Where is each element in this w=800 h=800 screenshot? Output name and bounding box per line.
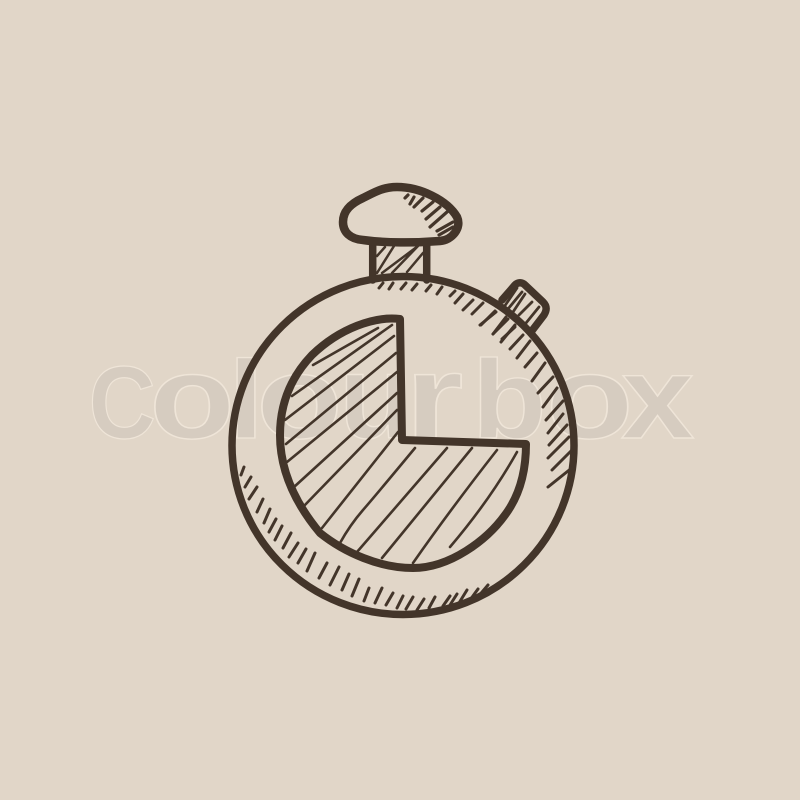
stopwatch stem	[373, 242, 427, 280]
dial diagonal hatching	[285, 325, 517, 563]
icon: stopwatch	[232, 187, 574, 614]
case shading ticks: bottom	[241, 467, 488, 610]
dial pie sector	[280, 319, 526, 568]
watermark: Colourbox: o	[256, 331, 343, 463]
watermark: Colourbox	[89, 329, 694, 464]
watermark: Colourbox: l	[228, 338, 264, 462]
watermark: Colourbox: C	[89, 345, 156, 460]
watermark: Colourbox: o	[546, 331, 633, 463]
watermark: Colourbox: x	[621, 331, 694, 463]
watermark: Colourbox: r	[405, 329, 463, 464]
case shading ticks: right	[480, 312, 573, 487]
watermark: Colourbox: b	[472, 337, 547, 462]
outer case ring	[232, 276, 574, 614]
watermark: Colourbox: o	[149, 332, 235, 464]
top crown button	[343, 187, 458, 242]
side pusher button	[502, 283, 546, 332]
case shading ticks: top	[379, 283, 515, 339]
watermark: Colourbox: u	[339, 330, 412, 464]
